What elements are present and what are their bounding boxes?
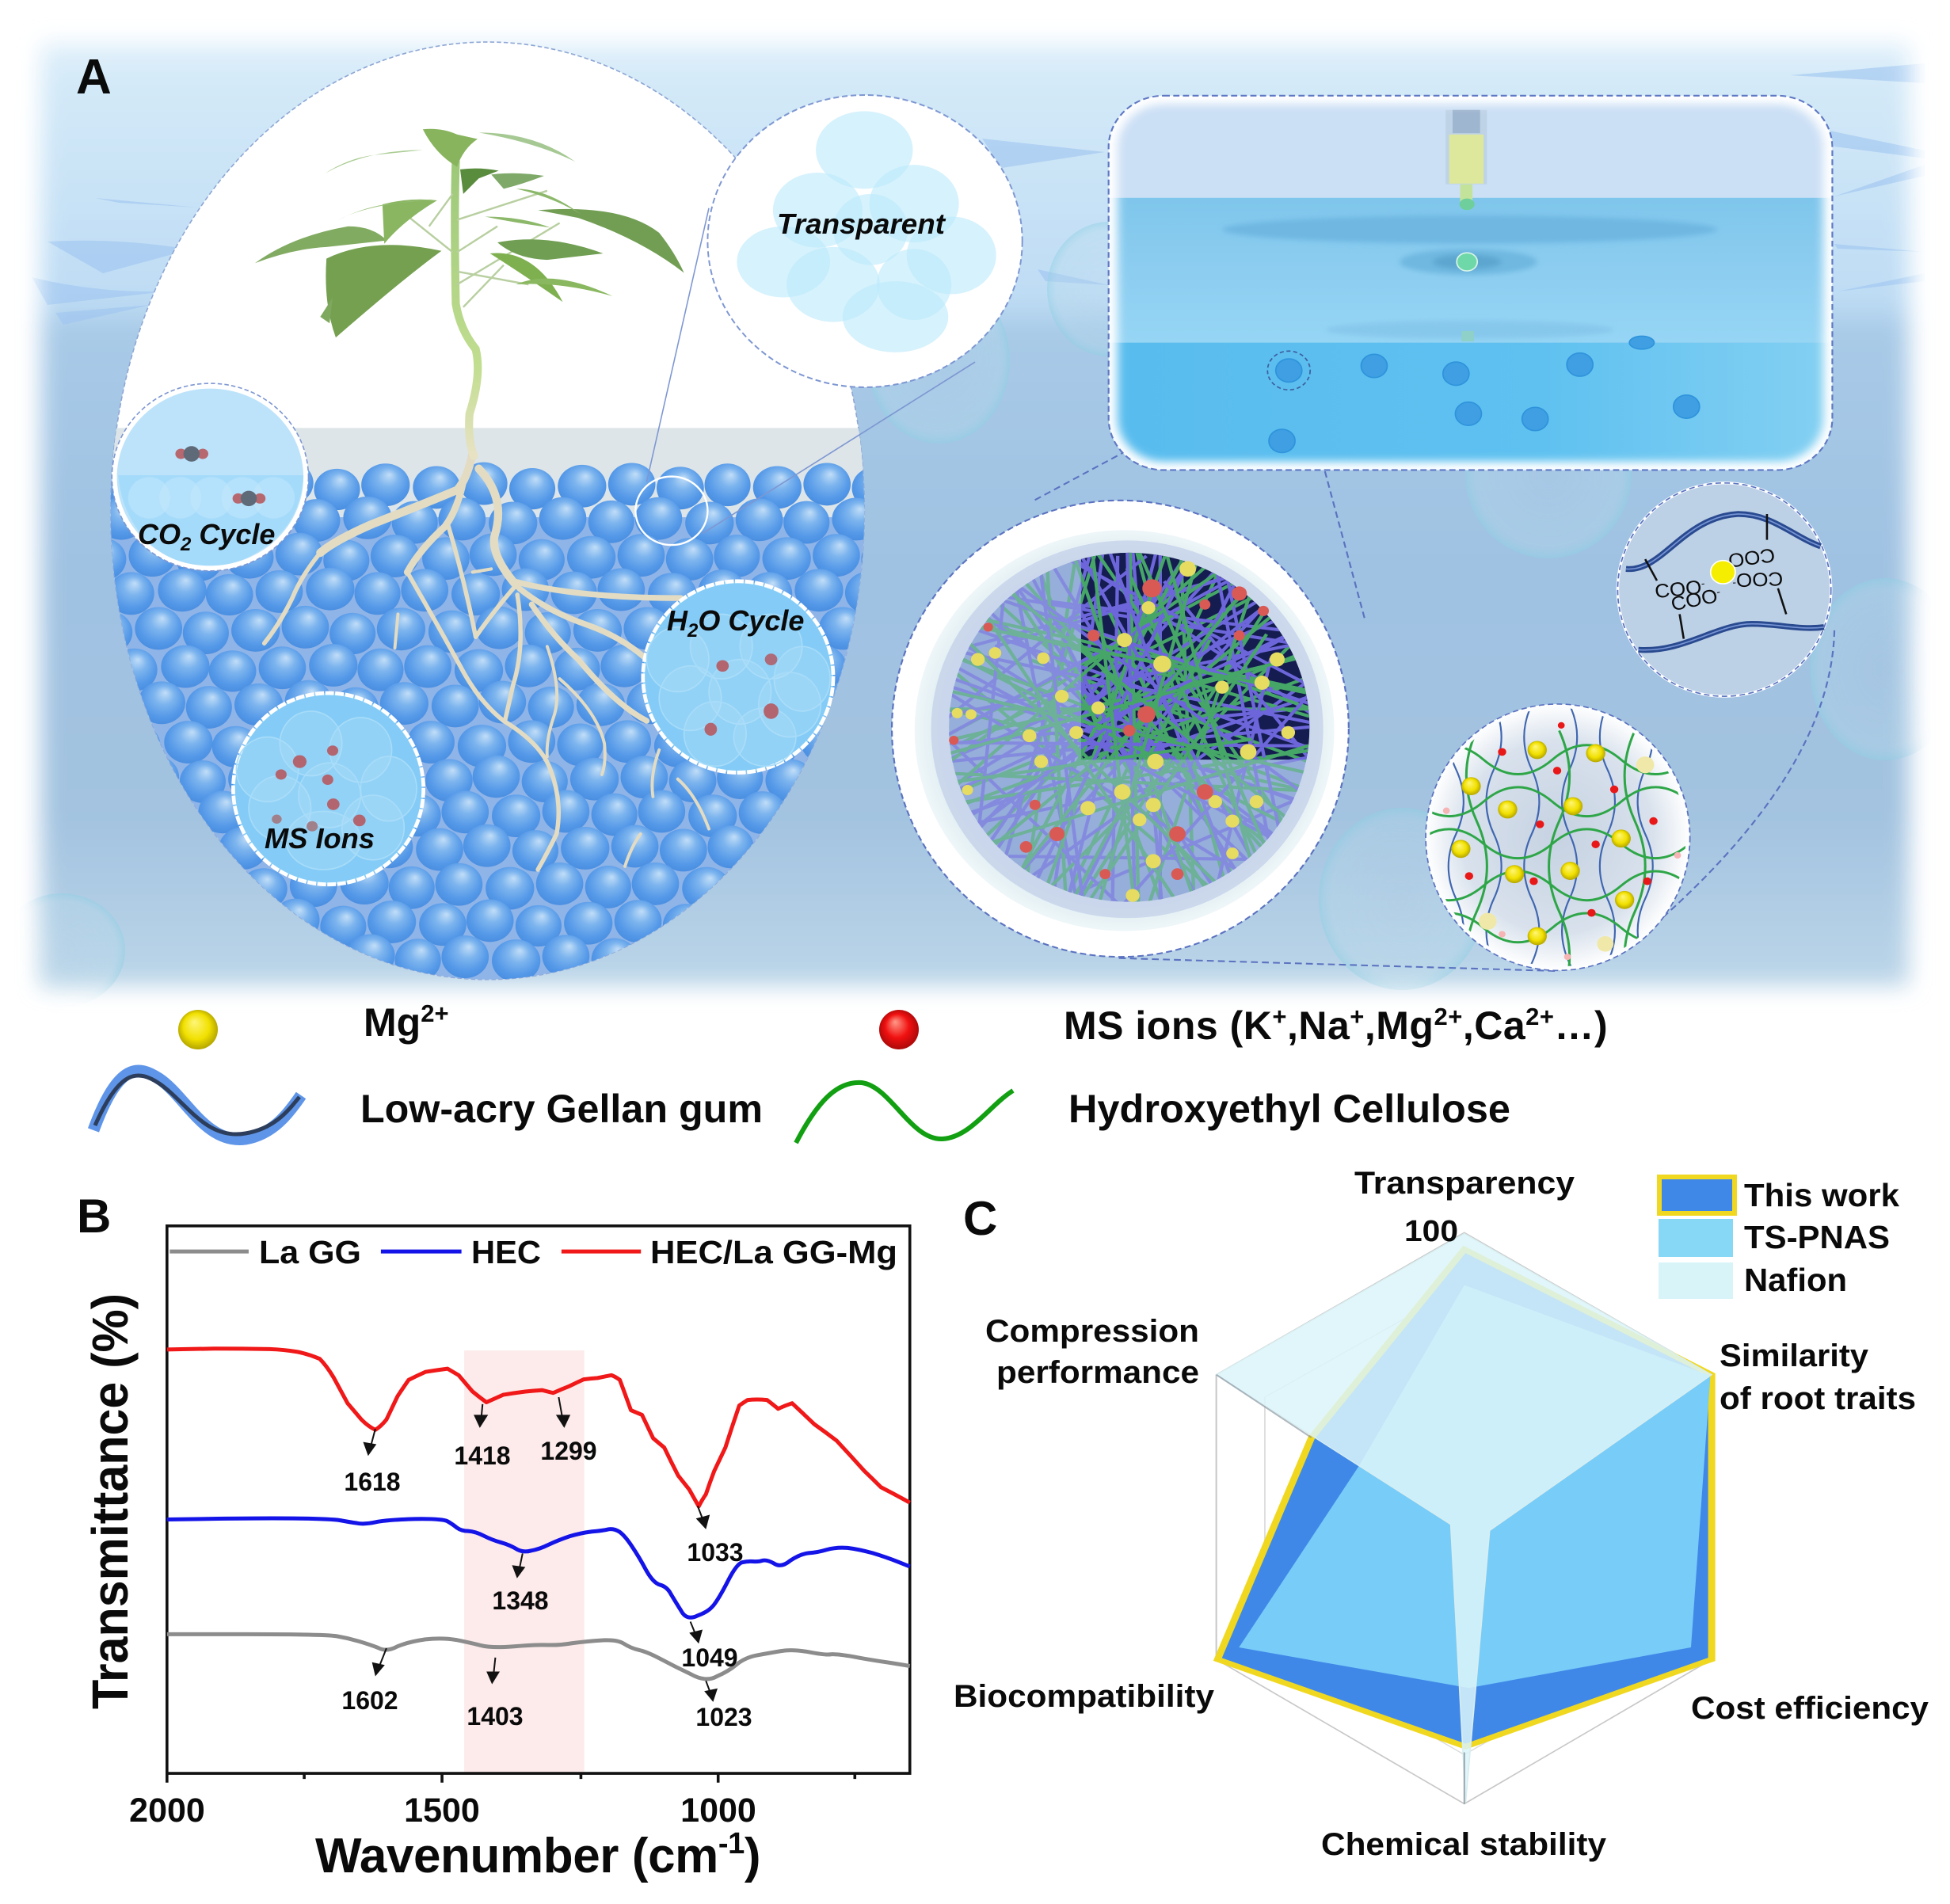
roots [265,452,709,870]
inset: crosslinked network [1425,703,1690,971]
legend label TS-PNAS: TS-PNAS [1744,1219,1890,1255]
MS ions label: 2+ [1525,1003,1554,1030]
peak labels: 1023 [695,1703,752,1731]
peak labels [341,1437,752,1731]
axis max value: 100 [1404,1215,1458,1248]
fibre ball [891,499,1350,958]
x axis title: ) [745,1829,760,1883]
panel A left: plant root in particle soil [110,41,1023,981]
axis label similarity: Similarity [1720,1339,1869,1373]
radar polygons [1217,1232,1712,1804]
axis label compression: Compression [985,1314,1199,1349]
peak labels: 1602 [341,1686,398,1715]
inset: transparent discs [707,95,1023,387]
background wave streaks [32,63,1925,325]
x axis ticks: 2000 [129,1792,205,1830]
icon: MS ion ball [879,1010,919,1049]
panel A right: droplet crosslinking and network [891,95,1836,973]
panel C: radar chart [954,1166,1929,1862]
panel A background: watery scene [32,44,1925,986]
label CO2 Cycle: 2 [180,534,192,555]
x axis ticks: 1500 [404,1792,480,1830]
label MS Ions: MS Ions [265,822,375,855]
axis label transparency: Transparency [1354,1166,1575,1201]
inset: COO- Mg coordination: - [1701,577,1705,589]
series: this work [1217,1249,1712,1746]
MS ions label: …) [1554,1003,1608,1048]
Mg label: 2+ [421,1000,449,1027]
legend label this work: This work [1744,1177,1899,1213]
peak labels: 1299 [540,1437,597,1465]
ions in ball [952,562,1295,902]
axis label chemical stability: Chemical stability [1321,1827,1607,1862]
label Transparent: Transparent [777,208,946,240]
x axis title: Wavenumber (cm [315,1829,718,1883]
x axis title: -1 [718,1827,745,1860]
label H2O Cycle: H [667,604,687,637]
plant leaves [255,129,684,337]
inset: COO- Mg coordination: COO [1669,585,1720,615]
lines to Transparent callout [647,208,975,533]
inset: COO- Mg coordination: COO [1727,543,1777,571]
icon: cellulose strand [796,1083,1013,1143]
x axis ticks [129,1792,756,1830]
MS ions label: ,Ca [1463,1003,1526,1048]
peak labels: 1403 [467,1702,524,1731]
peak arrows [370,1397,711,1696]
inset: COO- Mg coordination: COO [1654,577,1703,603]
soil of blue hydrogel spheres [111,428,865,980]
axis label cost efficiency: Cost efficiency [1691,1691,1929,1726]
grey curve [167,1634,910,1679]
MS ions label: MS ions (K [1064,1003,1272,1048]
legend label composite: HEC/La GG-Mg [650,1234,897,1270]
Mg label: Mg [364,1000,421,1045]
syringe [1445,110,1487,210]
plot frame and curves [167,1226,910,1783]
series: TS-PNAS [1239,1285,1710,1688]
legend lines [169,1250,249,1254]
MS ions label: ,Na [1287,1003,1350,1048]
axis label biocompatibility: Biocompatibility [954,1679,1215,1714]
peak labels: 1618 [344,1468,401,1496]
plant stem [455,162,478,455]
inset: H2O cycle [643,581,833,772]
label H2O Cycle: O Cycle [698,604,804,637]
label CO2 Cycle: Cycle [191,518,275,550]
inset: MS ions [233,693,424,885]
y axis title: Transmittance (%) [82,1293,139,1709]
dashed connector lines [1033,374,1834,971]
peak labels: 1049 [681,1643,738,1672]
gellan gum label: Low-acry Gellan gum [360,1087,763,1131]
legend labels: La GG [259,1234,361,1270]
MS ions label: + [1350,1003,1365,1030]
inset: COO- Mg coordination: - [1724,558,1730,570]
label CO2 Cycle: CO [138,518,181,550]
label B: B [77,1190,111,1243]
icon: gellan gum strand [93,1071,301,1140]
inset: COO- Mg coordination: - [1732,578,1736,589]
inset: COO- Mg coordination: - [1716,586,1721,598]
MS ions label: + [1272,1003,1287,1030]
highlight band [464,1350,585,1773]
x axis ticks: 1000 [680,1792,756,1830]
inset: CO2 cycle [112,383,308,571]
peak labels: 1033 [687,1538,744,1567]
label C: C [963,1192,997,1245]
legend label HEC: HEC [471,1234,541,1270]
legend swatches [1659,1177,1735,1299]
legend label Nafion: Nafion [1744,1262,1847,1298]
peak labels: 1348 [492,1586,549,1615]
MS ions label: ,Mg [1365,1003,1434,1048]
axis label root traits: of root traits [1720,1381,1916,1416]
MS ions label: 2+ [1434,1003,1463,1030]
peak labels: 1418 [454,1441,511,1470]
inset: COO- Mg coordination [1617,483,1831,696]
cellulose label: Hydroxyethyl Cellulose [1068,1087,1510,1131]
panel B: FTIR spectra [77,1190,910,1883]
label H2O Cycle: 2 [687,620,699,642]
axis label performance: performance [996,1355,1199,1390]
label A: A [76,50,112,105]
background bubbles [0,222,1950,1007]
inset: COO- Mg coordination: COO [1735,568,1784,591]
legend: materials key [93,1000,1608,1143]
magnifier ring on soil [635,477,707,545]
icon: Mg ball [178,1010,218,1049]
red curve [167,1349,910,1506]
blue curve [167,1518,910,1617]
series: Nafion [1217,1234,1712,1803]
tank with droplet [1109,96,1832,470]
